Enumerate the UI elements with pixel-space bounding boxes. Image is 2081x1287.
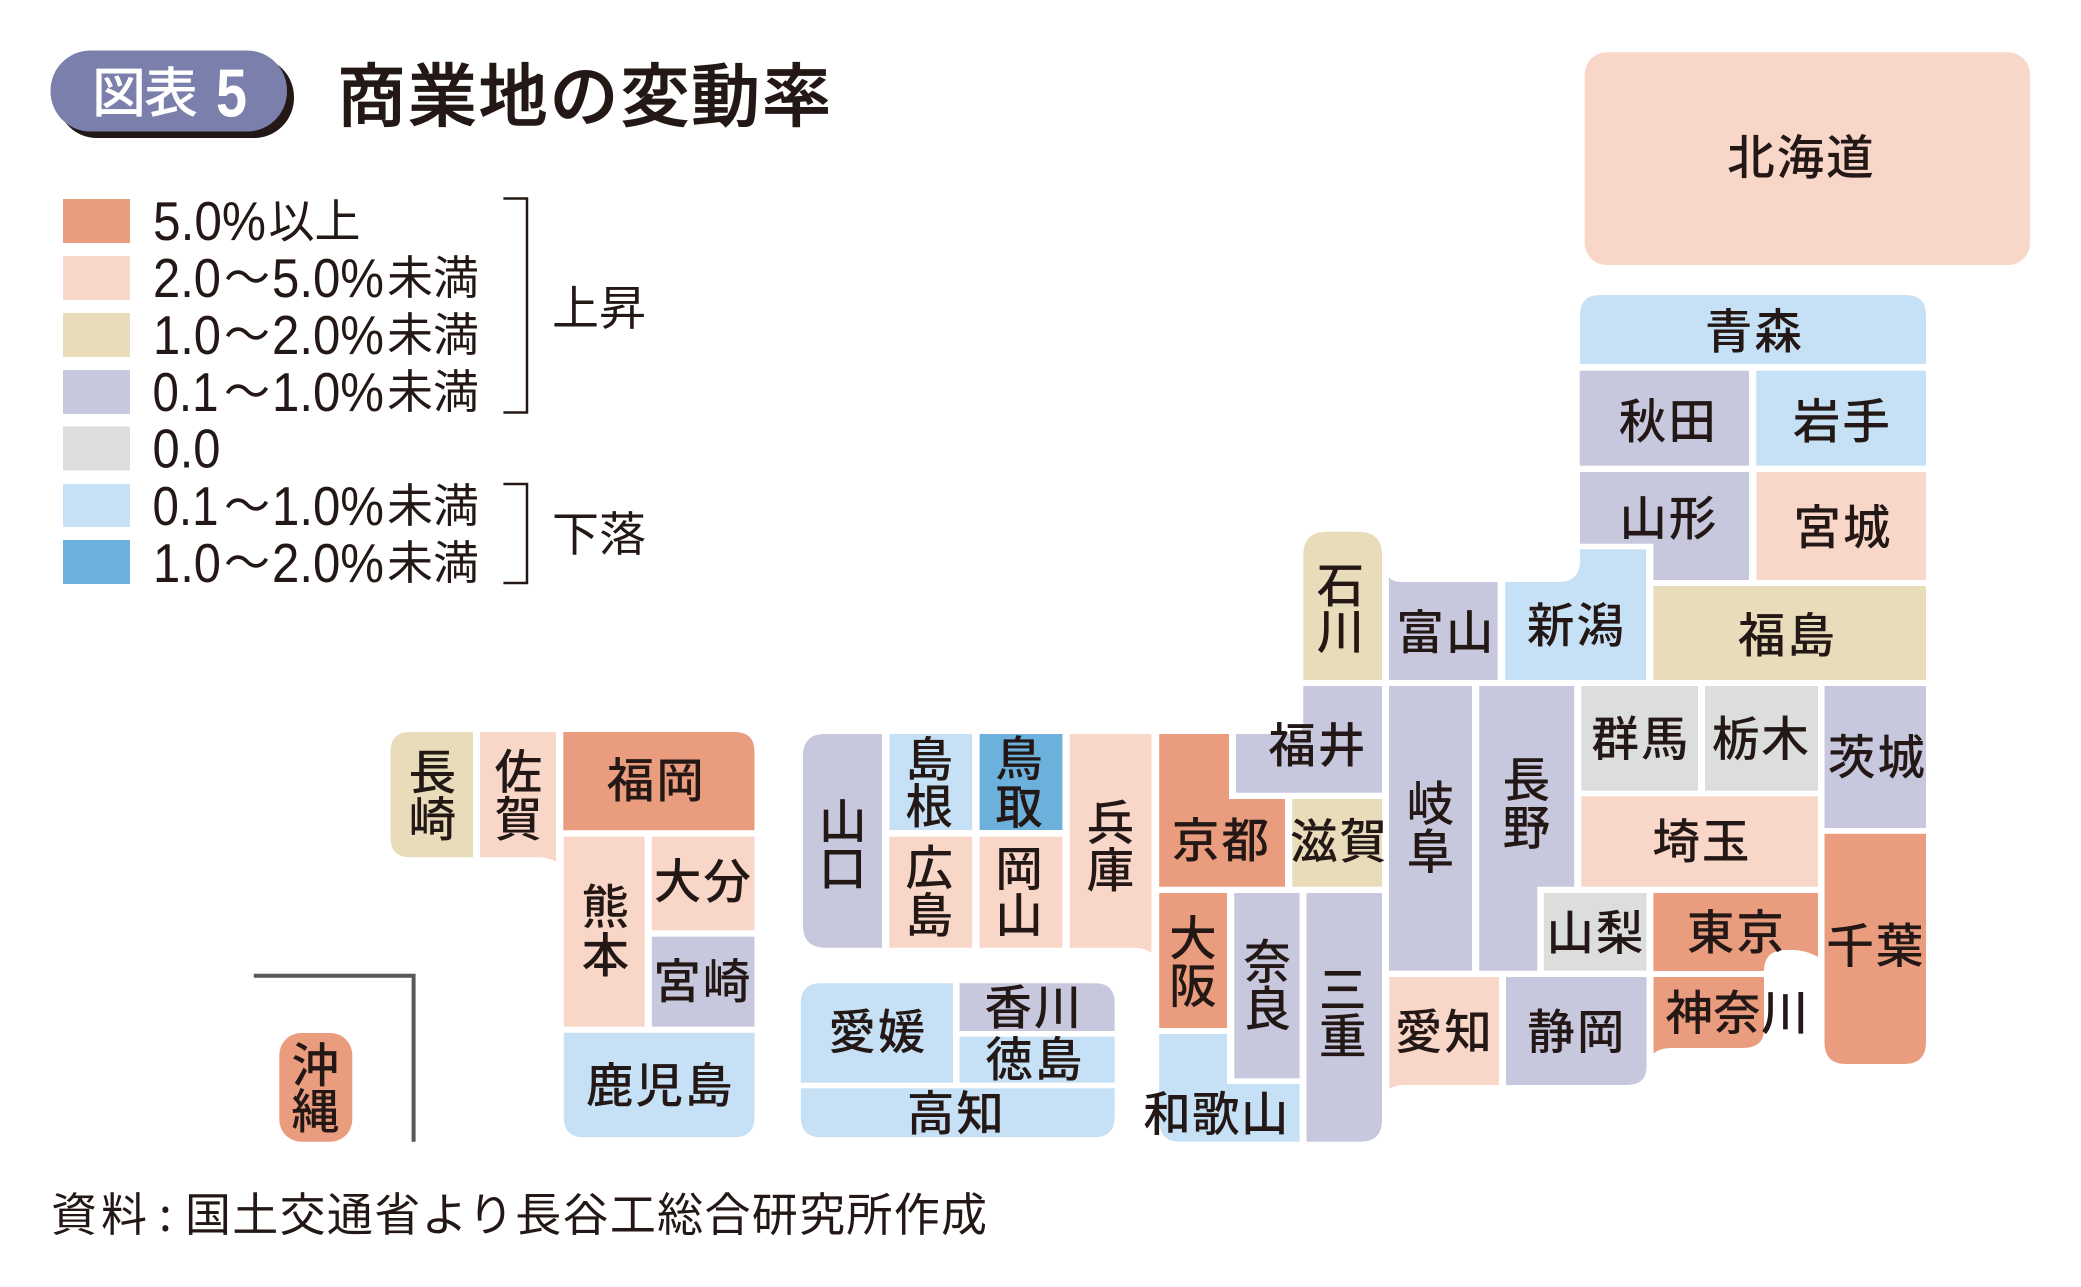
Fukushima: 福島 bbox=[1738, 598, 1837, 666]
Niigata: 新潟 bbox=[1527, 588, 1626, 656]
Kyoto: 京都 bbox=[1172, 802, 1271, 872]
Kumamoto: 熊 bbox=[582, 869, 629, 938]
Tokushima: 徳島 bbox=[985, 1022, 1084, 1090]
legend row: 0.1 to 1.0% rise: 未満 bbox=[387, 356, 479, 422]
legend row: 2.0 to 5.0% bbox=[63, 242, 479, 309]
Saitama bbox=[1581, 796, 1818, 887]
Aichi: 愛知 bbox=[1395, 994, 1494, 1063]
Yamaguchi: 口 bbox=[819, 830, 866, 900]
legend row: 1.0 to 2.0% fall: 未満 bbox=[387, 527, 479, 593]
Gifu bbox=[1389, 686, 1472, 971]
Shimane bbox=[889, 722, 972, 838]
Hiroshima: 広 bbox=[905, 830, 953, 899]
Yamaguchi bbox=[803, 734, 882, 948]
map of prefectures bbox=[254, 52, 2030, 1145]
Aomori bbox=[1580, 294, 1926, 364]
figure badge: 5 bbox=[216, 56, 247, 132]
Shimane: 島 bbox=[905, 722, 953, 790]
Saga: 佐 bbox=[495, 734, 542, 803]
legend row: 0.1 to 1.0% rise: 1.0% bbox=[272, 361, 384, 423]
Nara: 奈 bbox=[1243, 924, 1291, 993]
Kanagawa: 神奈川 bbox=[1665, 975, 1808, 1044]
legend row: 1.0 to 2.0%: ～ bbox=[224, 299, 270, 365]
Hiroshima bbox=[889, 830, 972, 948]
legend row: 1.0 to 2.0% fall: 1.0 bbox=[153, 532, 221, 594]
Tottori: 鳥 bbox=[995, 721, 1043, 790]
Akita bbox=[1580, 371, 1749, 466]
legend row: 1.0 to 2.0%: 未満 bbox=[387, 299, 479, 365]
legend row: 5.0% or more: 5.0% bbox=[153, 190, 266, 252]
label: rise: 上昇 bbox=[552, 270, 646, 339]
Tokyo: 東京 bbox=[1687, 894, 1786, 964]
Ishikawa: 石 bbox=[1317, 548, 1364, 616]
legend row: 5.0% or more: 以上 bbox=[268, 186, 360, 252]
Niigata bbox=[1505, 549, 1646, 680]
Tokyo bbox=[1653, 893, 1818, 971]
Mie: 重 bbox=[1319, 998, 1366, 1068]
Gifu: 阜 bbox=[1407, 814, 1454, 883]
Kagoshima: 鹿児島 bbox=[586, 1048, 734, 1116]
Tochigi: 栃木 bbox=[1712, 701, 1811, 770]
Miyagi: 宮城 bbox=[1793, 490, 1892, 558]
bracket: fall bbox=[503, 484, 527, 583]
Tottori bbox=[980, 721, 1062, 838]
legend row: 2.0 to 5.0%: 5.0% bbox=[272, 247, 384, 309]
Iwate bbox=[1756, 371, 1926, 466]
legend row: 2.0 to 5.0%: 2.0 bbox=[153, 247, 221, 309]
Okinawa: 縄 bbox=[291, 1074, 339, 1142]
Shimane: 根 bbox=[905, 768, 953, 838]
Okayama: 岡 bbox=[995, 831, 1043, 900]
Yamagata bbox=[1580, 472, 1749, 580]
Toyama bbox=[1389, 577, 1498, 680]
Chiba bbox=[1824, 834, 1926, 1064]
legend row: 0.1 to 1.0% fall: 1.0% bbox=[272, 475, 384, 537]
Ibaraki: 茨城 bbox=[1828, 720, 1927, 788]
legend row: 1.0 to 2.0% fall: ～ bbox=[224, 527, 270, 593]
legend row: 5.0% or more bbox=[63, 186, 360, 252]
Gifu: 岐 bbox=[1407, 766, 1454, 835]
Iwate: 岩手 bbox=[1793, 384, 1892, 452]
Aomori: 青森 bbox=[1705, 294, 1804, 362]
legend row: 2.0 to 5.0%: ～ bbox=[224, 242, 270, 308]
Shiga: 滋賀 bbox=[1290, 804, 1389, 872]
Kumamoto bbox=[564, 837, 645, 1027]
Nara: 良 bbox=[1243, 971, 1291, 1040]
Fukuoka: 福岡 bbox=[607, 742, 706, 812]
figure badge: 図表 bbox=[92, 49, 198, 128]
legend row: 1.0 to 2.0% fall: 2.0% bbox=[272, 532, 384, 594]
Fukui: 福井 bbox=[1268, 708, 1367, 776]
Wakayama: 和歌山 bbox=[1143, 1076, 1288, 1145]
Gunma bbox=[1581, 686, 1698, 791]
Akita: 秋田 bbox=[1619, 384, 1718, 452]
Ibaraki bbox=[1824, 686, 1927, 828]
Nara bbox=[1234, 893, 1300, 1078]
Aichi bbox=[1389, 977, 1499, 1089]
Nagano bbox=[1479, 686, 1574, 971]
legend row: 0.1 to 1.0% fall: 未満 bbox=[387, 470, 479, 536]
legend row: 0.0 bbox=[63, 418, 220, 480]
legend row: 1.0 to 2.0%: 2.0% bbox=[272, 304, 384, 366]
Ehime: 愛媛 bbox=[828, 994, 927, 1063]
legend row: 0.1 to 1.0% rise bbox=[63, 356, 479, 423]
source note: 国土交通省より長谷工総合研究所作成 bbox=[185, 1179, 987, 1245]
Osaka: 大 bbox=[1169, 900, 1217, 970]
Kumamoto: 本 bbox=[582, 918, 629, 986]
Tochigi bbox=[1705, 686, 1818, 791]
Hiroshima: 島 bbox=[905, 878, 953, 946]
Shizuoka: 静岡 bbox=[1527, 994, 1626, 1063]
bracket: rise bbox=[503, 198, 527, 412]
source note: 資料 bbox=[51, 1179, 147, 1245]
Hokkaido bbox=[1585, 52, 2030, 265]
Kagawa: 香川 bbox=[984, 970, 1083, 1038]
Hyogo bbox=[1070, 734, 1151, 953]
Osaka: 阪 bbox=[1169, 948, 1217, 1017]
legend row: 0.1 to 1.0% rise: 0.1 bbox=[152, 361, 218, 423]
Fukuoka bbox=[563, 732, 754, 830]
Chiba: 千葉 bbox=[1826, 908, 1925, 977]
Okayama: 山 bbox=[995, 878, 1043, 946]
Ishikawa bbox=[1303, 532, 1382, 680]
title: 商業地の変動率 bbox=[337, 40, 831, 140]
Mie: 三 bbox=[1319, 952, 1366, 1021]
legend row: 2.0 to 5.0%: 未満 bbox=[387, 242, 479, 308]
Nagasaki: 崎 bbox=[409, 782, 456, 850]
figure badge bbox=[50, 49, 294, 138]
Nagano: 野 bbox=[1503, 790, 1550, 859]
Fukushima bbox=[1653, 586, 1926, 680]
Gunma: 群馬 bbox=[1591, 701, 1690, 770]
Fukui bbox=[1236, 686, 1382, 793]
legend row: 0.1 to 1.0% fall: 0.1 bbox=[152, 475, 218, 537]
Kochi bbox=[801, 1076, 1115, 1144]
legend row: 0.1 to 1.0% rise: ～ bbox=[224, 356, 270, 422]
Saga bbox=[480, 732, 556, 862]
Kagawa bbox=[960, 970, 1115, 1038]
legend row: 1.0 to 2.0% fall bbox=[63, 527, 479, 594]
Yamanashi: 山梨 bbox=[1546, 895, 1645, 964]
legend row: 0.0: 0.0 bbox=[152, 418, 220, 480]
label: fall: 下落 bbox=[552, 496, 646, 565]
Ishikawa: 川 bbox=[1317, 594, 1364, 663]
Okinawa bbox=[279, 1028, 352, 1142]
Ehime bbox=[801, 983, 953, 1083]
Miyazaki: 宮崎 bbox=[653, 944, 752, 1012]
Miyagi bbox=[1757, 472, 1926, 580]
Osaka bbox=[1159, 893, 1227, 1028]
Mie bbox=[1306, 893, 1382, 1142]
Oita: 大分 bbox=[654, 844, 753, 912]
Yamaguchi: 山 bbox=[819, 784, 866, 852]
Toyama: 富山 bbox=[1396, 594, 1495, 664]
Nagasaki: 長 bbox=[409, 734, 456, 804]
legend row: 1.0 to 2.0%: 1.0 bbox=[153, 304, 221, 366]
Nagasaki bbox=[390, 732, 473, 857]
Kagoshima bbox=[564, 1033, 754, 1137]
Kochi: 高知 bbox=[907, 1076, 1006, 1144]
legend bbox=[63, 186, 646, 594]
Tokushima bbox=[960, 1022, 1115, 1090]
Tottori: 取 bbox=[995, 769, 1043, 838]
Wakayama bbox=[1143, 1034, 1300, 1145]
Nagano: 長 bbox=[1503, 742, 1550, 811]
Shizuoka bbox=[1506, 977, 1647, 1085]
Okinawa inset divider bbox=[254, 976, 414, 1142]
Okinawa: 沖 bbox=[291, 1028, 339, 1096]
legend row: 0.1 to 1.0% fall: ～ bbox=[224, 470, 270, 536]
Saitama: 埼玉 bbox=[1652, 804, 1751, 872]
Hokkaido: 北海道 bbox=[1727, 120, 1876, 188]
Hyogo: 庫 bbox=[1087, 832, 1134, 902]
legend row: 0.1 to 1.0% fall bbox=[63, 470, 479, 537]
Yamagata: 山形 bbox=[1619, 480, 1718, 550]
Hyogo: 兵 bbox=[1087, 785, 1134, 854]
Saga: 賀 bbox=[495, 782, 542, 850]
Kyoto bbox=[1159, 734, 1285, 887]
source note: : bbox=[159, 1179, 172, 1245]
legend row: 1.0 to 2.0% bbox=[63, 299, 479, 366]
Okayama bbox=[980, 831, 1062, 948]
